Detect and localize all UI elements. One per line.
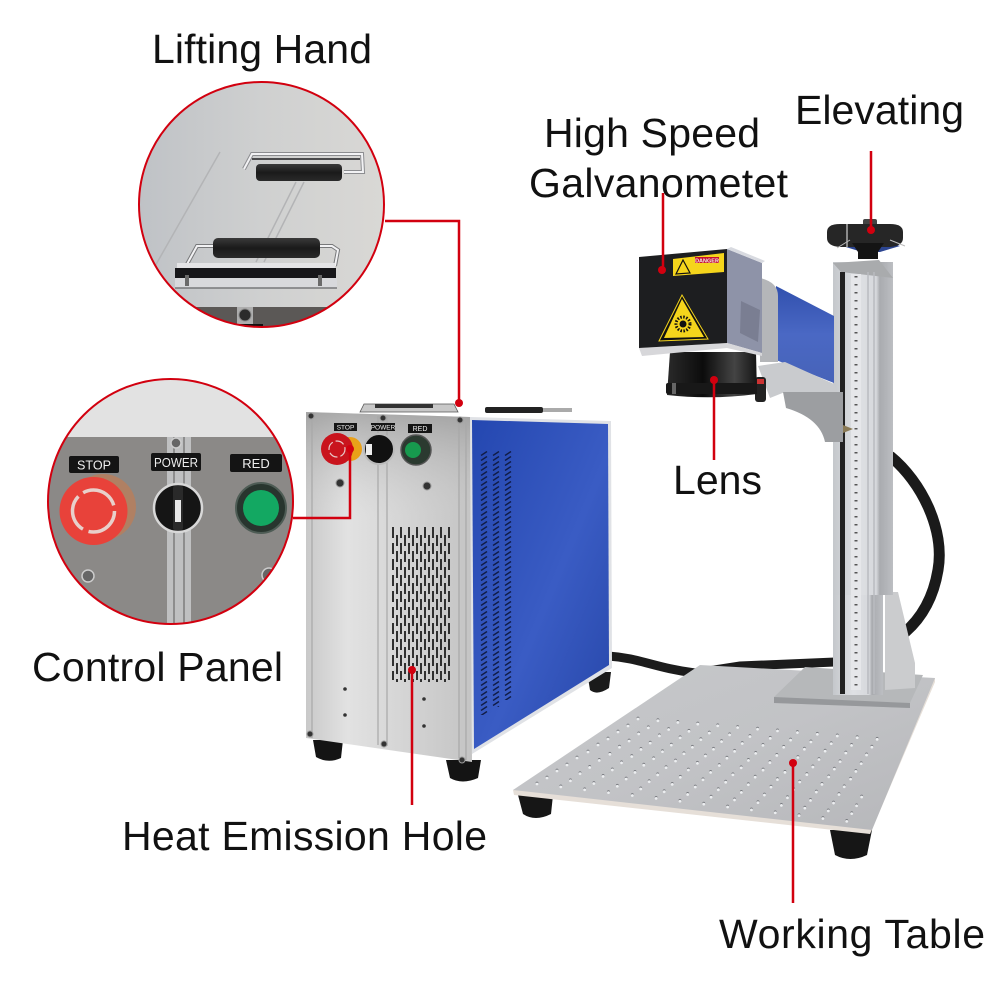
elevating handwheel: [827, 219, 905, 259]
galvanometer arm: [755, 278, 843, 442]
callout line: elevating: [867, 151, 875, 234]
bracket: [783, 392, 843, 442]
big POWER switch: [151, 453, 202, 532]
label: high speed galvanometer: [529, 110, 789, 206]
control box: [306, 404, 612, 782]
POWER switch: [364, 423, 396, 464]
callout line: control panel: [293, 445, 354, 518]
scale knob: [843, 425, 853, 433]
grey arm mount: [760, 278, 778, 362]
galvanometer head: [639, 247, 765, 356]
callout line: working table: [789, 759, 797, 903]
side cable on the column: [890, 456, 939, 634]
label: lifting hand: Lifting Hand: [152, 26, 372, 72]
lower panel edge: [196, 307, 326, 326]
table mounting holes: [537, 719, 885, 822]
RED indicator: [401, 424, 432, 465]
box feet: [313, 740, 481, 782]
rail strip: [167, 437, 191, 627]
callout line: lifting hand: [385, 221, 463, 407]
column base plate: [774, 667, 923, 708]
big STOP button: STOP: [77, 458, 111, 472]
label: working table: Working Table: [719, 911, 985, 957]
far handle: [244, 154, 363, 181]
table edge: [513, 678, 935, 834]
panel ridge: [156, 152, 304, 265]
cable from control box: [608, 656, 835, 673]
column body: [833, 262, 893, 595]
big STOP button: [60, 456, 136, 545]
table feet: [518, 795, 872, 859]
near handle: [175, 238, 338, 288]
lens: [666, 352, 757, 397]
label: high speed galvanometer: High Speed: [544, 110, 760, 156]
small lens adjust knob: [755, 377, 766, 402]
danger sticker: DANGER: [695, 258, 719, 264]
RED indicator: RED: [413, 426, 427, 433]
head front: [639, 249, 727, 348]
big RED indicator: [230, 454, 286, 533]
label: control panel: Control Panel: [32, 644, 283, 690]
laser warning triangle: [659, 295, 708, 341]
head bottom lip: [639, 343, 762, 356]
label: high speed galvanometer: Galvanometet: [529, 160, 789, 206]
scale ruler: [851, 274, 861, 690]
blue arm: [776, 286, 834, 383]
STOP button: STOP: [337, 424, 354, 432]
big RED indicator: RED: [242, 456, 270, 471]
front panel: [306, 412, 472, 762]
column stand: [774, 260, 923, 708]
side vents: [480, 451, 512, 715]
front vent: heat emission hole: [393, 527, 449, 682]
callout line: heat emission hole: [408, 666, 416, 805]
top handles: [360, 404, 572, 413]
callout line: lens: [710, 376, 718, 460]
screws and holes: [307, 413, 465, 763]
panel screws: [82, 438, 276, 582]
light top band: [68, 380, 274, 437]
label: elevating: Elevating: [795, 87, 964, 133]
STOP button: [321, 423, 362, 465]
rear foot of control box: [587, 672, 611, 693]
callout line: galvanometer: [658, 193, 666, 274]
table top: [513, 665, 935, 830]
label: lens: Lens: [673, 457, 762, 503]
gusset: [885, 592, 915, 690]
label: heat emission hole: Heat Emission Hole: [122, 813, 487, 859]
big POWER switch: POWER: [154, 455, 198, 470]
work table with base: [513, 656, 935, 859]
inset circle: lifting hand: [130, 82, 390, 332]
inset circle: control panel: [40, 375, 300, 627]
dark slot: [840, 272, 845, 694]
blue side panel: [470, 417, 612, 754]
POWER switch: POWER: [371, 424, 396, 432]
head side: [727, 249, 762, 353]
